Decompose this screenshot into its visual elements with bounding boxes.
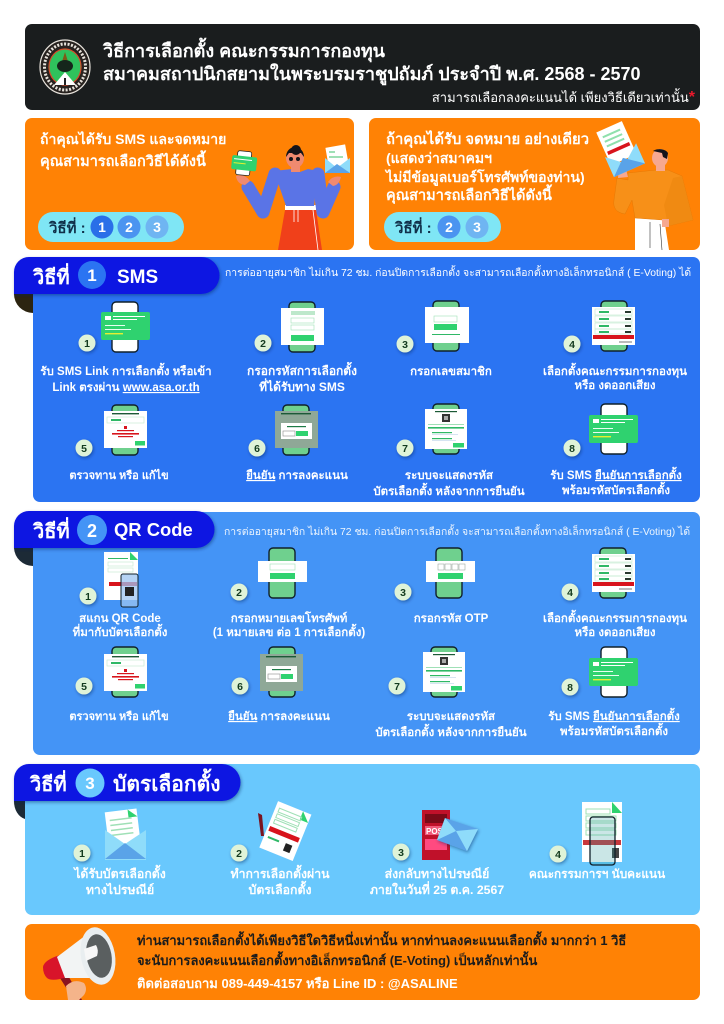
tab heading: วิธีที่ [32,516,70,543]
step 1: ได้รับบัตรเลือกตั้ง [72,864,166,881]
heading [102,37,641,86]
text block: ถ้าคุณได้รับ SMS และจดหมาย [40,130,226,148]
step 8: 8 [569,443,575,455]
step 6: ยืนยัน การลงคะแนน [228,710,330,723]
method pill [38,212,184,242]
step 5: ตรวจทาน หรือ แก้ไข [69,709,169,723]
tab heading [14,511,214,566]
step 6: 6 [254,443,260,455]
step 2: (1 หมายเลข ต่อ 1 การเลือกตั้ง) [213,623,365,639]
method pill: 2 [125,219,133,235]
tab heading: วิธีที่ [29,769,67,796]
subheading: สามารถเลือกลงคะแนนได้ เพียงวิธีเดียวเท่านั้น* [432,88,696,106]
heading: สมาคมสถาปนิกสยามในพระบรมราชูปถัมภ์ ประจำปี พ.ศ. 2568 - 2570 [103,63,641,86]
icon: envelope [325,144,350,173]
step 7 [375,647,527,739]
step 2: กรอกหมายเลขโทรศัพท์ [231,610,348,625]
tab heading: SMS [117,267,158,288]
icon: association logo [40,40,90,94]
text block: คุณสามารถเลือกวิธีได้ดังนี้ [40,150,206,170]
step 3: กรอกเลขสมาชิก [410,365,492,378]
step 8: พร้อมรหัสบัตรเลือกตั้ง [560,722,668,738]
tab heading [14,257,220,313]
step 8 [550,404,682,497]
step 6: 6 [237,681,243,693]
step 1: ที่มากับบัตรเลือกตั้ง [73,623,168,639]
panel: letter only [369,118,700,250]
step 3: 3 [398,847,404,859]
step 5: 5 [81,443,87,455]
panel: method 3 paper ballot [14,764,700,915]
step 7: 7 [402,443,408,455]
step 1: รับ SMS Link การเลือกตั้ง หรือเข้า [40,362,212,378]
step 6 [228,647,330,723]
step 3 [396,301,492,378]
step 2: ทำการเลือกตั้งผ่าน [230,864,330,881]
text block: ไม่มีข้อมูลเบอร์โทรศัพท์ของท่าน) [384,168,585,186]
step 7: บัตรเลือกตั้ง หลังจากการยืนยัน [375,723,527,739]
icon: megaphone [43,924,120,1000]
step 4: หรือ งดออกเสียง [574,379,656,392]
step 2 [230,801,330,897]
step 1: สแกน QR Code [79,613,161,625]
step 7: ระบบจะแสดงรหัส [407,710,496,723]
step 8: รับ SMS ยืนยันการเลือกตั้ง [548,707,680,723]
method pill: วิธีที่ : [394,217,432,237]
step 2: 2 [236,587,242,599]
step 4: เลือกตั้งคณะกรรมการกองทุน [543,609,687,626]
contact: ติดต่อสอบถาม 089-449-4157 หรือ Line ID : @ASALINE [137,976,458,991]
step 8: 8 [567,682,573,694]
step 1 [73,552,168,639]
step 2: 2 [260,338,266,350]
step 5 [69,647,169,723]
note: การต่ออายุสมาชิก ไม่เกิน 72 ชม. ก่อนปิดการเลือกตั้ง จะสามารถเลือกตั้งทางอิเล็กทรอนิกส์ ( E-Voting) ได้ [224,524,690,538]
step 3 [394,548,489,625]
method pill [384,212,501,242]
step 3 [370,810,504,897]
notice text: ท่านสามารถเลือกตั้งได้เพียงวิธีใดวิธีหนึ่งเท่านั้น หากท่านลงคะแนนเลือกตั้ง มากกว่า 1 วิธี [137,931,626,948]
text block: ถ้าคุณได้รับ จดหมาย อย่างเดียว [386,130,589,148]
figure: woman holding phone and envelope [230,144,350,250]
step 1: 1 [79,848,85,860]
panel: method 2 QR Code [14,511,700,755]
step 5: ตรวจทาน หรือ แก้ไข [69,468,169,482]
step 4: เลือกตั้งคณะกรรมการกองทุน [543,362,687,379]
step 8: รับ SMS ยืนยันการเลือกตั้ง [550,466,682,482]
step 2: บัตรเลือกตั้ง [249,880,311,897]
step 4: หรือ งดออกเสียง [574,626,656,639]
tab heading: วิธีที่ [32,262,70,289]
step 6: ยืนยัน การลงคะแนน [246,469,348,482]
step 4 [543,301,687,392]
step 3: POST [426,827,448,836]
step 2: ที่ได้รับทาง SMS [259,378,345,394]
step 4: 4 [569,339,575,351]
step 3: ภายในวันที่ 25 ต.ค. 2567 [370,881,504,897]
icon: phone with card [230,150,258,176]
method pill: 2 [445,219,453,235]
step 4: คณะกรรมการฯ นับคะแนน [529,867,666,881]
step 7 [373,404,525,498]
step 1: ทางไปรษณีย์ [86,882,154,897]
step 6 [246,405,348,482]
header panel [25,24,700,110]
step 5: 5 [81,681,87,693]
text block: คุณสามารถเลือกวิธีได้ดังนี้ [386,184,552,204]
tab heading: 2 [87,521,97,541]
notice text: จะนับการลงคะแนนเลือกตั้งทางอิเล็กทรอนิกส์ (E-Voting) เป็นหลักเท่านั้น [137,951,537,968]
step 7: บัตรเลือกตั้ง หลังจากการยืนยัน [373,482,525,498]
heading: วิธีการเลือกตั้ง คณะกรรมการกองทุน [102,37,386,63]
text block [40,130,226,170]
step 2: กรอกรหัสการเลือกตั้ง [247,361,357,378]
step 4 [529,802,666,881]
method pill: 1 [98,219,106,235]
tab heading: บัตรเลือกตั้ง [113,768,221,796]
text block: (แสดงว่าสมาคมฯ [386,150,492,166]
tab heading: 1 [87,266,97,285]
step 1: Link ตรงผ่าน www.asa.or.th [52,381,200,394]
method pill: 3 [473,219,481,235]
tab heading [14,764,240,819]
tab heading: QR Code [114,519,193,540]
step 3: กรอกรหัส OTP [414,612,489,625]
step 7: ระบบจะแสดงรหัส [405,469,494,482]
step 2: 2 [236,848,242,860]
panel: method 1 SMS [14,257,700,502]
step 1: 1 [84,338,90,350]
step 1 [40,302,212,394]
step 7: 7 [394,681,400,693]
panel: footer notice [25,924,700,1000]
step 3: 3 [402,339,408,351]
step 3: 3 [400,587,406,599]
step 2 [247,302,357,394]
step 1: 1 [85,591,91,603]
step 2 [213,548,365,639]
notice text [137,931,626,968]
step 8: พร้อมรหัสบัตรเลือกตั้ง [562,481,670,497]
note: การต่ออายุสมาชิก ไม่เกิน 72 ชม. ก่อนปิดการเลือกตั้ง จะสามารถเลือกตั้งทางอิเล็กทรอนิกส์ ( E-Voting) ได้ [225,265,691,279]
panel: SMS and letter [25,118,354,250]
step 8 [548,647,680,738]
step 4: 4 [567,587,573,599]
tab heading: 3 [85,774,95,793]
step 5 [69,405,169,482]
step 3: ส่งกลับทางไปรษณีย์ [385,866,489,881]
method pill: 3 [153,219,161,235]
step 4 [543,548,687,639]
step 1 [72,808,166,897]
method pill: วิธีที่ : [48,217,86,237]
figure: man holding envelope [594,119,693,250]
step 4: 4 [555,849,561,861]
icon: ballot in envelope [594,119,645,177]
text block [384,130,589,204]
